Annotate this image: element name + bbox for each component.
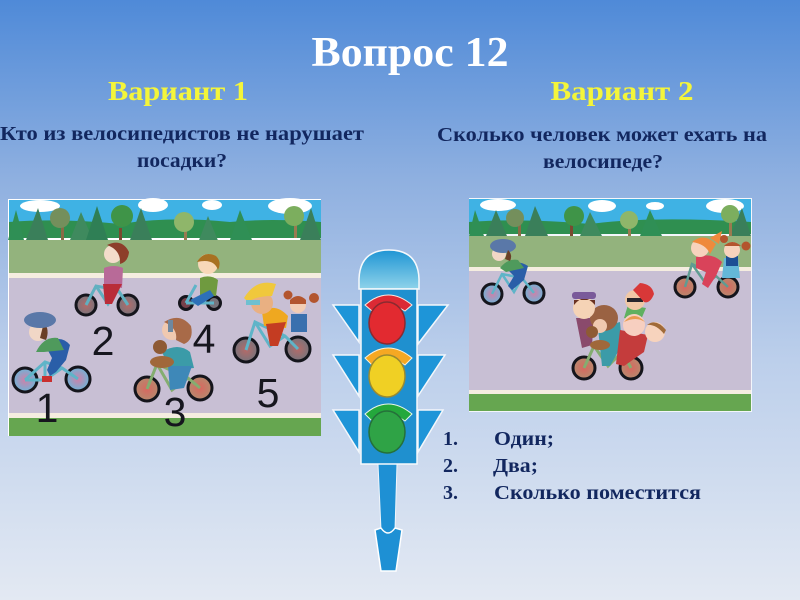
cyclist 3	[135, 318, 212, 401]
signal: red	[365, 295, 412, 344]
numbers: 1	[36, 385, 58, 431]
numbers	[36, 316, 279, 435]
cyclist with helmet	[482, 239, 544, 304]
icon: traffic light	[333, 250, 448, 571]
side visors	[333, 305, 448, 452]
cyclist 2	[76, 243, 138, 315]
answer list: 2.	[443, 455, 458, 477]
question: variant 2: велосипеде?	[543, 151, 663, 173]
answer list: 1.	[443, 428, 458, 450]
dome	[359, 250, 419, 289]
overloaded bicycle	[572, 283, 666, 379]
cyclist 1	[13, 312, 90, 392]
question: variant 1: посадки?	[137, 150, 227, 172]
answer list	[443, 428, 701, 504]
pole	[378, 464, 397, 534]
heading: variant 2: Вариант 2	[550, 76, 694, 106]
title: Вопрос 12	[312, 30, 508, 76]
cyclist 5	[234, 283, 319, 362]
question: variant 1: Кто из велосипедистов не нарушает	[0, 123, 364, 145]
illustration: variant 2 cyclists	[469, 198, 752, 412]
numbers: 2	[92, 318, 114, 364]
answer list: Два;	[493, 455, 538, 477]
answer list: 3.	[443, 482, 458, 504]
answer list: Сколько поместится	[494, 482, 701, 504]
illustration: variant 1 cyclists	[8, 198, 321, 436]
numbers: 5	[257, 370, 279, 416]
pole arrow tip	[375, 528, 402, 571]
heading: variant 1: Вариант 1	[108, 76, 248, 106]
signal: yellow	[365, 348, 412, 397]
numbers: 3	[164, 389, 186, 435]
signal: green	[365, 404, 412, 453]
answer list: Один;	[494, 428, 554, 450]
housing	[361, 289, 417, 464]
cyclist 4	[180, 254, 220, 310]
question: variant 2: Сколько человек может ехать на	[437, 124, 767, 146]
cyclist with child seat	[675, 231, 750, 297]
question: variant 2	[437, 124, 767, 173]
numbers: 4	[193, 316, 215, 362]
question: variant 1	[0, 123, 364, 172]
